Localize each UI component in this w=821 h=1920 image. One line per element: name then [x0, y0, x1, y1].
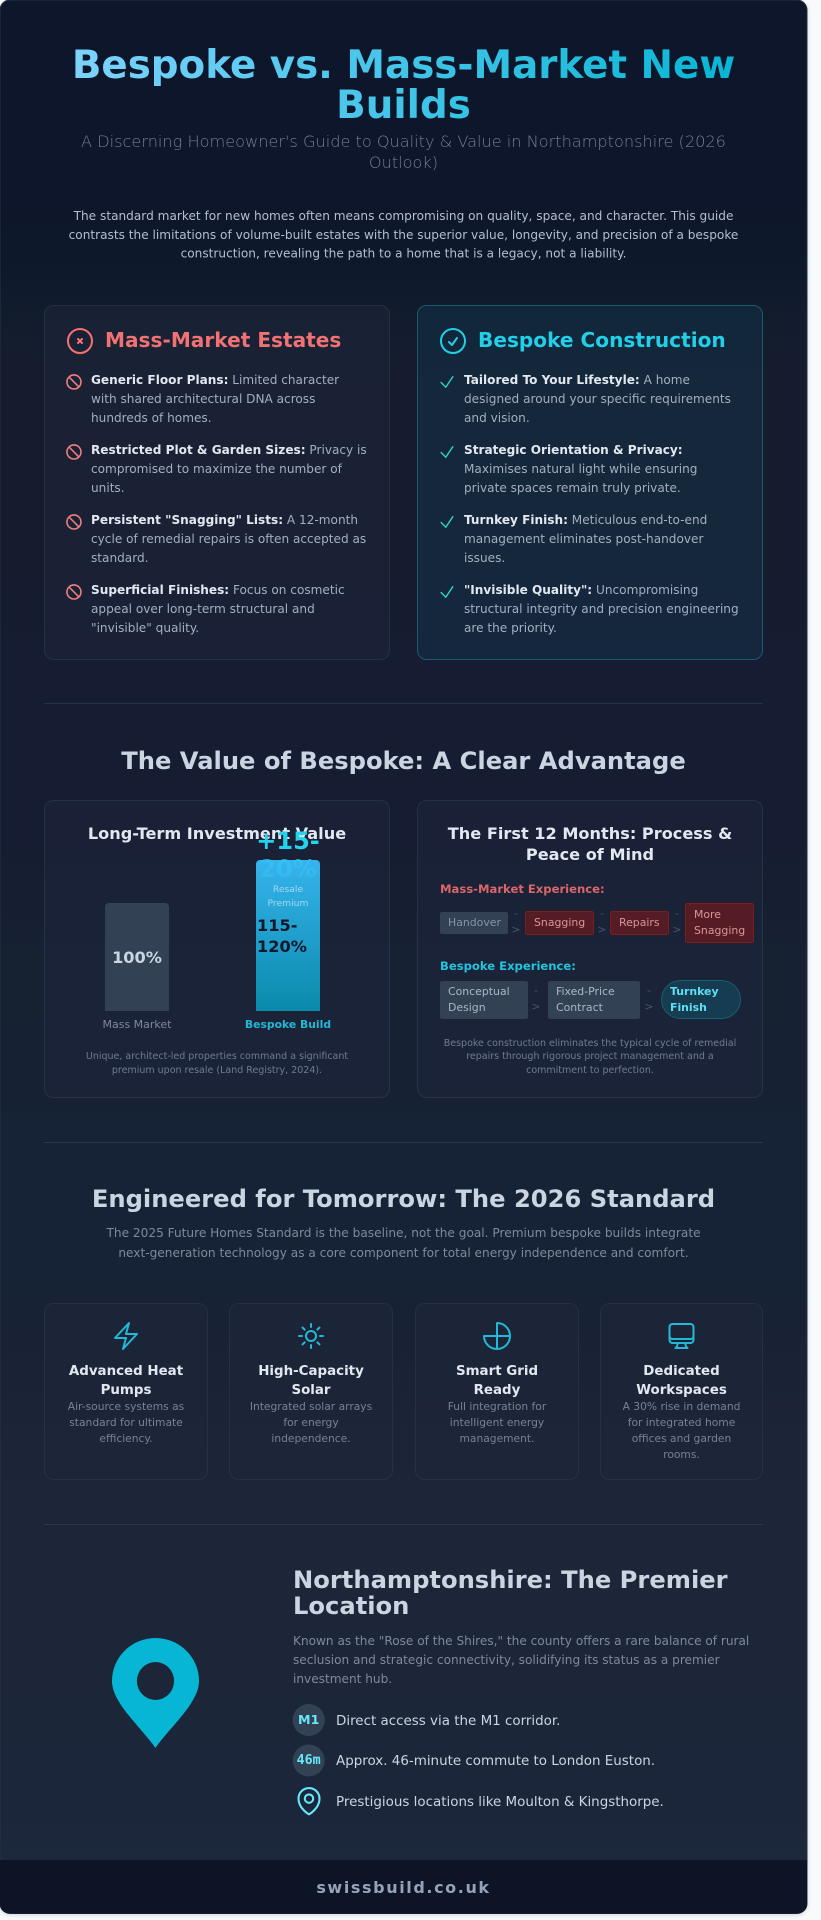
subtitle: A Discerning Homeowner's Guide to Quality & Value in Northamptonshire (2026 [81, 132, 726, 151]
intro text: The standard market for new homes often means compromising on quality, space, and character. This guide [73, 209, 733, 223]
item: restricted plot: Restricted Plot & Garden Sizes: Privacy is [91, 443, 367, 457]
title [72, 43, 735, 128]
flow: mass-market: > [511, 923, 521, 936]
location description: investment hub. [293, 1672, 392, 1686]
card: dedicated workspaces: Dedicated [643, 1364, 720, 1379]
location description: seclusion and strategic connectivity, solidifying its status as a premier [293, 1653, 720, 1667]
card: high-capacity solar: Integrated solar arrays [250, 1400, 373, 1413]
flow: mass-market: Repairs [619, 916, 660, 929]
panel: long-term investment value [44, 800, 390, 1098]
flow: bespoke: Contract [556, 1001, 604, 1014]
icon: check circle [441, 329, 465, 353]
subtitle [81, 132, 726, 172]
bar: mass market: Mass Market [102, 1018, 172, 1031]
heading: engineered for tomorrow: Engineered for Tomorrow: The 2026 Standard [92, 1185, 715, 1213]
flow: mass-market: Snagging [534, 916, 585, 929]
flow: bespoke [440, 980, 740, 1019]
title: Builds [336, 83, 471, 128]
bar: mass market [102, 903, 172, 1031]
process title: The First 12 Months: Process & [448, 824, 732, 843]
item: turnkey finish: Turnkey Finish: Meticulous end-to-end [464, 513, 707, 527]
item: strategic orientation: private spaces remain truly private. [464, 481, 681, 495]
process title [448, 824, 732, 864]
item: invisible quality: are the priority. [464, 621, 557, 635]
item: generic floor plans: Generic Floor Plans: Limited character [91, 373, 339, 387]
card: high-capacity solar: independence. [271, 1432, 351, 1445]
bar: bespoke build [245, 827, 331, 1031]
flow: bespoke: > [644, 1000, 654, 1013]
chart note: Unique, architect-led properties command a significant [86, 1051, 348, 1062]
process title: Peace of Mind [526, 845, 654, 864]
card: smart grid ready [416, 1304, 578, 1480]
section intro: The 2025 Future Homes Standard is the baseline, not the goal. Premium bespoke builds integrate [105, 1226, 701, 1240]
bar: bespoke build: Premium [268, 898, 308, 909]
row: M1 [293, 1704, 560, 1736]
item: strategic orientation [441, 443, 697, 495]
item: superficial finishes: appeal over long-term structural and [91, 602, 315, 616]
chart note: premium upon resale (Land Registry, 2024). [112, 1065, 322, 1076]
row: 46m: Approx. 46-minute commute to London Euston. [336, 1754, 655, 1769]
bar: mass market: 100% [112, 948, 162, 967]
flow: mass-market: More [694, 908, 721, 921]
item: superficial finishes [67, 583, 345, 635]
footer [0, 1860, 807, 1914]
icon: bolt [115, 1323, 137, 1349]
item: strategic orientation: Strategic Orientation & Privacy: [464, 443, 683, 457]
item: turnkey finish [441, 513, 707, 565]
item: persistent snagging [67, 513, 366, 565]
flow: bespoke: Conceptual [448, 985, 510, 998]
item: invisible quality [441, 583, 739, 635]
icon: monitor [669, 1324, 693, 1348]
heading: northamptonshire: Location [293, 1592, 409, 1620]
location description [293, 1634, 749, 1686]
row: 46m [293, 1744, 655, 1776]
card: advanced heat pumps [44, 1304, 208, 1480]
icon: grid pie [484, 1323, 510, 1349]
intro text: contrasts the limitations of volume-built estates with the superior value, longevity, and precision of a bespoke [69, 228, 738, 242]
item: superficial finishes: Superficial Finishes: Focus on cosmetic [91, 583, 345, 597]
location description: Known as the "Rose of the Shires," the county offers a rare balance of rural [293, 1634, 749, 1648]
card: advanced heat pumps: Advanced Heat [69, 1364, 184, 1379]
heading: northamptonshire [293, 1566, 728, 1620]
panel: bespoke construction [418, 306, 762, 660]
intro text [69, 209, 738, 260]
card: smart grid ready: Ready [474, 1383, 521, 1398]
item: restricted plot: compromised to maximize the number of [91, 462, 343, 476]
flow: mass-market: - [600, 907, 604, 920]
card: dedicated workspaces: Workspaces [636, 1383, 727, 1398]
card: smart grid ready: Smart Grid [456, 1364, 538, 1379]
process note: commitment to perfection. [526, 1065, 654, 1076]
card: high-capacity solar: for energy [283, 1416, 339, 1429]
item: tailored: and vision. [464, 411, 530, 425]
flow: mass-market [440, 904, 754, 942]
flow: mass-market: Snagging [694, 924, 745, 937]
process note [444, 1038, 736, 1076]
row: M1: Direct access via the M1 corridor. [336, 1714, 560, 1729]
heading: northamptonshire: Northamptonshire: The Premier [293, 1566, 728, 1594]
title: Bespoke vs. Mass-Market New [72, 43, 735, 88]
flow: mass-market: > [597, 923, 607, 936]
item: generic floor plans: hundreds of homes. [91, 411, 212, 425]
bar: bespoke build: +15- [256, 827, 320, 855]
chart note [86, 1051, 348, 1076]
panel: location text [293, 1566, 749, 1814]
icon: x circle [68, 329, 92, 353]
heading: value of bespoke: The Value of Bespoke: A Clear Advantage [121, 747, 686, 775]
bar: bespoke build: Resale [273, 884, 303, 895]
card: dedicated workspaces: A 30% rise in demand [623, 1400, 740, 1413]
item: persistent snagging: Persistent "Snagging" Lists: A 12-month [91, 513, 358, 527]
heading: mass-market estates: Mass-Market Estates [105, 328, 341, 352]
icon: large map pin [112, 1638, 199, 1748]
card: dedicated workspaces: rooms. [663, 1448, 700, 1461]
bar: bespoke build: 20% [259, 855, 317, 883]
row: prestigious locations [298, 1788, 664, 1814]
item: invisible quality: structural integrity and precision engineering [464, 602, 739, 616]
card: advanced heat pumps: efficiency. [99, 1432, 153, 1445]
header [72, 43, 735, 172]
flow: bespoke: > [531, 1000, 541, 1013]
card: advanced heat pumps: standard for ultimate [69, 1416, 183, 1429]
footer: swissbuild.co.uk [316, 1878, 491, 1897]
item: generic floor plans [67, 373, 339, 425]
chart title: Long-Term Investment Value [88, 824, 346, 843]
item: restricted plot: units. [91, 481, 125, 495]
intro text: construction, revealing the path to a home that is a legacy, not a liability. [181, 246, 626, 260]
item: superficial finishes: "invisible" quality. [91, 621, 199, 635]
flow: bespoke: Design [448, 1001, 486, 1014]
row: 46m: 46m [297, 1753, 321, 1768]
flow: bespoke: Turnkey [670, 985, 719, 998]
item: turnkey finish: issues. [464, 551, 505, 565]
card: dedicated workspaces: for integrated home [628, 1416, 735, 1429]
bar: bespoke build: Bespoke Build [245, 1018, 331, 1031]
item: generic floor plans: with shared architectural DNA across [91, 392, 315, 406]
card: dedicated workspaces: offices and garden [632, 1432, 731, 1445]
flow: mass-market: Handover [448, 916, 501, 929]
section intro: next-generation technology as a core component for total energy independence and comfort. [118, 1246, 689, 1260]
row: M1: M1 [298, 1712, 319, 1727]
row: prestigious locations: Prestigious locations like Moulton & Kingsthorpe. [336, 1795, 664, 1810]
flow: bespoke: Fixed-Price [556, 985, 615, 998]
item: tailored [441, 373, 731, 425]
item: restricted plot [67, 443, 367, 495]
flow: mass-market: > [672, 923, 682, 936]
flow: bespoke: - [647, 984, 651, 997]
label: mass-market experience: Mass-Market Experience: [440, 882, 605, 896]
card: advanced heat pumps: Air-source systems as [68, 1400, 185, 1413]
process note: repairs through rigorous project management and a [466, 1051, 714, 1062]
card: dedicated workspaces [600, 1304, 762, 1480]
card: smart grid ready: management. [460, 1432, 534, 1445]
flow: mass-market: - [514, 907, 518, 920]
label: bespoke experience: Bespoke Experience: [440, 959, 576, 973]
subtitle: Outlook) [369, 153, 438, 172]
bar: bespoke build: 115- [257, 916, 297, 935]
item: turnkey finish: management eliminates post-handover [464, 532, 703, 546]
section intro [105, 1226, 701, 1260]
process note: Bespoke construction eliminates the typical cycle of remedial [444, 1038, 736, 1049]
card: high-capacity solar: Solar [291, 1383, 331, 1398]
card: smart grid ready: Full integration for [448, 1400, 547, 1413]
flow: bespoke: - [534, 984, 538, 997]
card: high-capacity solar: High-Capacity [258, 1364, 364, 1379]
item: tailored: Tailored To Your Lifestyle: A home [464, 373, 690, 387]
heading: bespoke construction: Bespoke Construction [478, 328, 726, 352]
card: high-capacity solar [230, 1304, 392, 1480]
item: invisible quality: "Invisible Quality": Uncompromising [464, 583, 698, 597]
item: tailored: designed around your specific requirements [464, 392, 731, 406]
bar: bespoke build: 120% [257, 937, 307, 956]
card: smart grid ready: intelligent energy [450, 1416, 544, 1429]
panel: first 12 months [418, 800, 762, 1098]
item: strategic orientation: Maximises natural light while ensuring [464, 462, 697, 476]
item: persistent snagging: standard. [91, 551, 148, 565]
flow: bespoke: Finish [670, 1001, 707, 1014]
panel: mass-market estates [44, 306, 390, 660]
flow: mass-market: - [675, 907, 679, 920]
item: persistent snagging: cycle of remedial repairs is often accepted as [91, 532, 366, 546]
card: advanced heat pumps: Pumps [101, 1383, 151, 1398]
icon: sun [299, 1324, 323, 1348]
